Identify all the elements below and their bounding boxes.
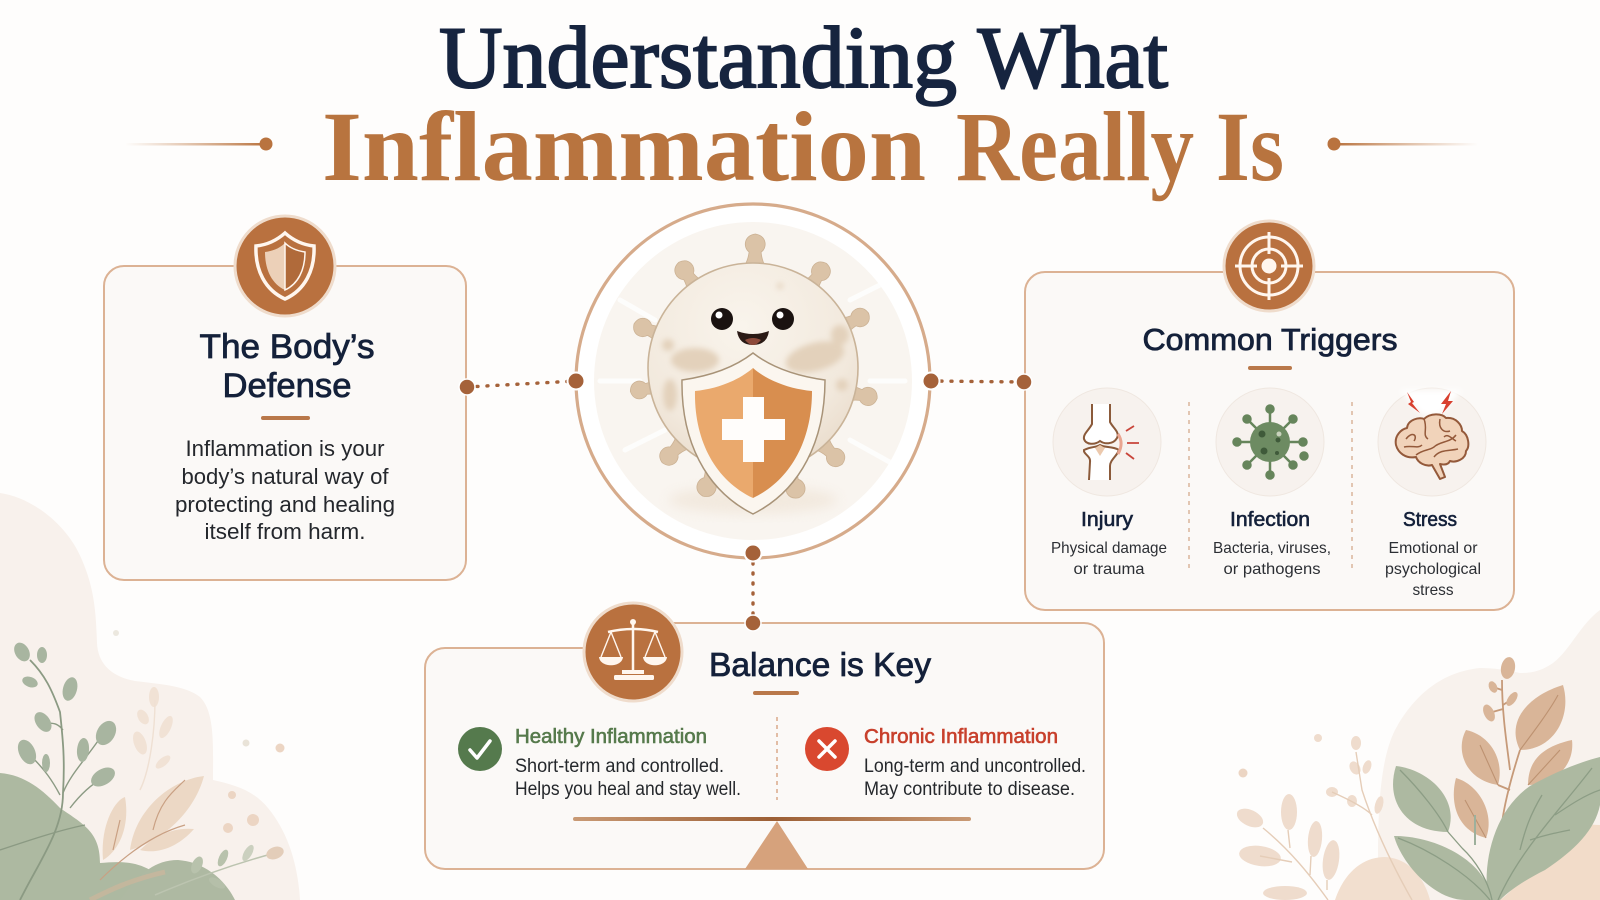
chronic inflammation: Chronic Inflammation	[864, 726, 1058, 748]
decoration: bottom-left foliage	[0, 493, 300, 900]
trigger: injury	[1051, 388, 1167, 578]
label: Stress	[1403, 509, 1457, 531]
heading underline	[261, 416, 310, 420]
body text: protecting and healing	[175, 492, 395, 517]
label: Injury	[1081, 509, 1133, 531]
description: Physical damage	[1051, 540, 1167, 557]
node: ring bottom	[744, 544, 762, 562]
title line 2: Really Is	[956, 91, 1284, 202]
healthy inflammation	[458, 726, 741, 800]
body text: Inflammation is your	[186, 436, 384, 461]
panel: balance is key	[425, 603, 1104, 869]
trigger: stress: stress	[1412, 582, 1454, 599]
divider	[776, 717, 778, 800]
title	[322, 10, 1284, 202]
icon: knee joint	[1084, 404, 1139, 480]
node: ring left	[568, 372, 584, 390]
body text: body’s natural way of	[182, 464, 389, 489]
label: Infection	[1230, 509, 1310, 531]
panel: the body's defense: Defense	[222, 367, 352, 405]
heading: The Body’s	[200, 328, 374, 366]
trigger: injury: or trauma	[1074, 561, 1145, 578]
healthy inflammation: Helps you heal and stay well.	[515, 779, 741, 800]
panel: the body's defense	[104, 216, 466, 580]
shield	[682, 353, 825, 514]
chronic inflammation	[805, 726, 1086, 800]
title ornament left	[125, 138, 272, 150]
panel: common triggers	[1025, 221, 1514, 610]
decoration: bottom-right foliage	[1234, 610, 1600, 900]
divider lines	[1189, 402, 1352, 568]
icon: check	[458, 727, 502, 771]
title line 2	[322, 91, 1284, 202]
icon: scales badge	[584, 603, 682, 701]
icon: stress bolts	[1407, 391, 1453, 414]
title ornament right	[1328, 138, 1478, 150]
cell body	[648, 263, 858, 473]
inner disc	[594, 222, 912, 540]
trigger: infection: or pathogens	[1224, 561, 1320, 578]
description: Emotional or	[1388, 540, 1478, 557]
cell spikes	[627, 234, 881, 504]
balance fulcrum	[745, 821, 808, 869]
icon: shield badge	[235, 216, 335, 316]
description: Bacteria, viruses,	[1213, 540, 1331, 557]
trigger: stress	[1378, 388, 1486, 599]
heading: Balance is Key	[709, 646, 931, 683]
node: bottom panel dot	[745, 615, 761, 631]
connector: left panel to centre	[467, 381, 576, 387]
connector: centre to right panel	[931, 381, 1024, 382]
heading underline	[1248, 366, 1292, 370]
trigger: stress: psychological	[1385, 561, 1481, 578]
healthy inflammation: Short-term and controlled.	[515, 756, 724, 777]
heading underline	[753, 691, 799, 695]
icon: cross	[805, 727, 849, 771]
icon: brain	[1396, 414, 1468, 479]
face	[711, 308, 794, 345]
connector: centre to bottom panel	[751, 553, 755, 623]
title line 2: Inflammation	[322, 91, 926, 202]
body text	[175, 436, 395, 544]
chronic inflammation: May contribute to disease.	[864, 779, 1075, 800]
node: right panel dot	[1016, 374, 1032, 390]
bolt backing	[1400, 390, 1462, 415]
central illustration	[576, 204, 930, 558]
icon: virus	[1234, 406, 1308, 478]
chronic inflammation: Long-term and uncontrolled.	[864, 756, 1086, 777]
node: ring right	[922, 372, 940, 390]
healthy inflammation: Healthy Inflammation	[515, 726, 707, 748]
node: left panel dot	[459, 379, 475, 395]
balance beam	[573, 817, 971, 821]
body text: itself from harm.	[204, 519, 366, 544]
outer ring	[576, 204, 930, 558]
icon: target badge	[1224, 221, 1314, 311]
trigger: infection	[1213, 388, 1331, 578]
heading: Common Triggers	[1142, 322, 1398, 357]
title line 1: Understanding What	[439, 10, 1168, 107]
